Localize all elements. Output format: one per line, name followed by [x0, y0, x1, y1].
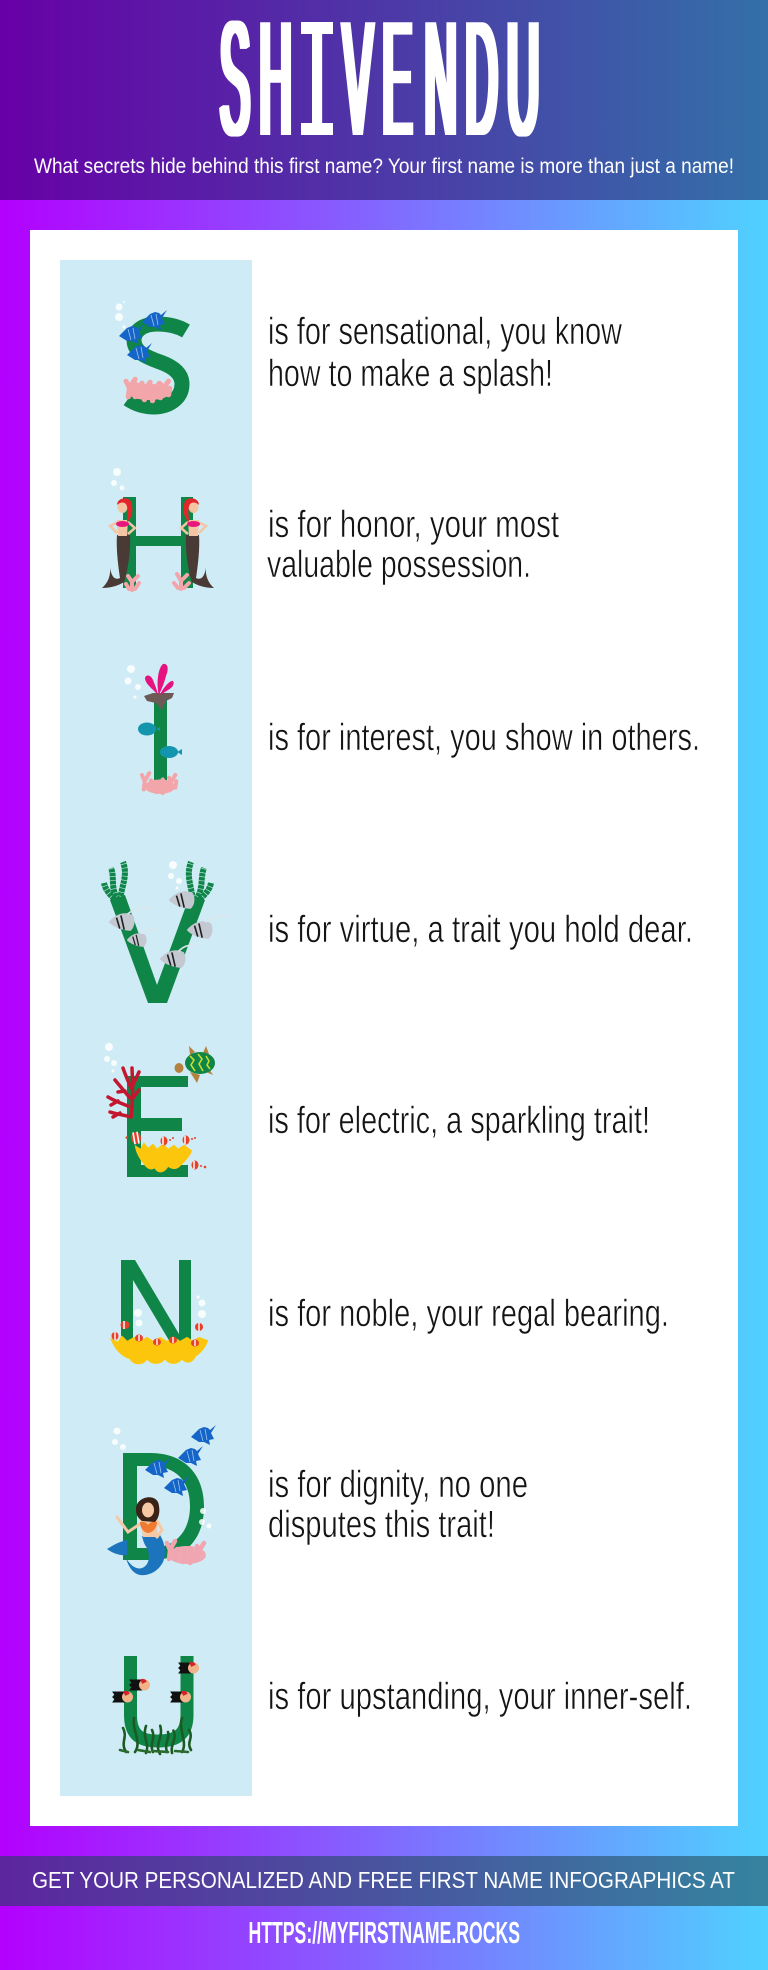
- angel fish 1: [109, 908, 151, 931]
- letter D illustration: [107, 1425, 216, 1575]
- is for E text: is for electric, a sparkling trait!: [268, 1100, 650, 1142]
- torso: [140, 1519, 158, 1537]
- clownfish 7: [195, 1323, 203, 1331]
- letter S shape: [128, 324, 186, 407]
- bubbles: [111, 468, 124, 490]
- red hair: [117, 498, 132, 522]
- blue fish: [145, 1425, 216, 1496]
- black and red fish: [112, 1662, 199, 1702]
- fish 3: [127, 343, 152, 363]
- fish 2: [142, 310, 167, 330]
- letter H shape: [123, 497, 193, 588]
- left mermaid: [102, 498, 135, 588]
- bubbles: [168, 861, 182, 890]
- letter I stem: [154, 700, 167, 784]
- S line 2: how to make a splash!: [268, 353, 553, 395]
- brown rock top: [144, 693, 174, 710]
- bubbles: [124, 665, 141, 698]
- clownfish 3: [182, 1136, 196, 1144]
- mermaid: [107, 1497, 165, 1575]
- header band: [0, 0, 768, 200]
- fish 3: [178, 1662, 199, 1674]
- clownfish group: [112, 1321, 203, 1346]
- letter S illustration: [115, 301, 186, 407]
- torso: [117, 520, 128, 536]
- bra: [187, 521, 200, 527]
- yellow coral: [136, 1144, 191, 1171]
- clownfish 2: [160, 1136, 174, 1146]
- clownfish 3: [135, 1334, 143, 1342]
- shell zigzag: [190, 1054, 210, 1071]
- fish 4: [164, 1476, 189, 1496]
- letter H illustration: [102, 468, 214, 590]
- bra: [116, 521, 129, 527]
- fish 1: [119, 324, 144, 344]
- arms: [117, 1517, 162, 1537]
- fish 4: [170, 1691, 191, 1702]
- bubbles: [104, 1043, 117, 1072]
- is for D text: [268, 1464, 528, 1546]
- letter E illustration: [104, 1043, 215, 1177]
- letter E shape: [127, 1076, 188, 1177]
- bubbles: [112, 1428, 212, 1528]
- tail fluke: [107, 1540, 127, 1555]
- D line 1: is for dignity, no one: [268, 1464, 528, 1506]
- D line 2: disputes this trait!: [268, 1504, 495, 1546]
- bubbles: [134, 1296, 206, 1326]
- footer url: HTTPS://MYFIRSTNAME.ROCKS: [248, 1916, 520, 1950]
- turtle: [174, 1046, 215, 1083]
- clownfish 1: [120, 1321, 130, 1329]
- teal fish: [138, 722, 182, 758]
- H line 1: is for honor, your most: [268, 504, 559, 546]
- face: [188, 501, 198, 513]
- arms: [110, 522, 135, 534]
- seaweed: [120, 1718, 191, 1754]
- right mermaid: [181, 498, 214, 588]
- corals: [126, 574, 189, 590]
- coral: [126, 379, 171, 401]
- shell: [185, 1052, 215, 1074]
- letter I illustration: [124, 664, 182, 794]
- tail: [102, 535, 130, 588]
- hair: [136, 1497, 159, 1522]
- flippers and head: [174, 1046, 213, 1083]
- H line 2: valuable possession.: [267, 544, 531, 586]
- torso: [188, 520, 199, 536]
- angel fish 2: [127, 930, 159, 947]
- orange top: [140, 1522, 157, 1533]
- fish 1: [191, 1425, 216, 1445]
- footer band: [0, 1856, 768, 1906]
- fish 2: [129, 1679, 150, 1690]
- seaweed fronds: [104, 862, 211, 902]
- letter D shape: [123, 1453, 204, 1560]
- red hair: [184, 498, 199, 522]
- letter N shape: [121, 1260, 191, 1342]
- is for S text: [268, 311, 622, 395]
- angel fish: [109, 891, 229, 968]
- pink fountain: [145, 664, 174, 695]
- yellow coral: [112, 1337, 207, 1363]
- is for H text: [267, 504, 559, 586]
- angel fish 3: [169, 891, 194, 909]
- fish 3: [145, 1458, 170, 1478]
- letter V illustration: [104, 861, 229, 1003]
- clownfish 6: [191, 1340, 199, 1346]
- clownfish 1: [125, 1131, 142, 1146]
- bubbles: [115, 301, 126, 328]
- letter U shape: [130, 1656, 187, 1741]
- face: [118, 501, 128, 513]
- light blue letter column: [60, 260, 252, 1796]
- letter N illustration: [112, 1260, 207, 1363]
- fish 2: [178, 1446, 203, 1466]
- blue fish: [119, 310, 167, 363]
- clownfish 2: [112, 1332, 118, 1340]
- face: [142, 1502, 154, 1518]
- clownfish 4: [192, 1160, 206, 1170]
- angel fish 5: [160, 945, 195, 968]
- clownfish 5: [169, 1336, 177, 1344]
- letter U illustration: [112, 1656, 199, 1754]
- fish 1: [112, 1691, 133, 1702]
- arms: [181, 522, 206, 534]
- coral: [142, 773, 176, 794]
- angel fish 4: [187, 916, 229, 939]
- letter V shape: [110, 895, 205, 1003]
- tail: [186, 535, 214, 588]
- white content panel: [30, 230, 738, 1826]
- coral: [167, 1541, 206, 1564]
- S line 1: is for sensational, you know: [268, 311, 622, 353]
- red coral: [108, 1068, 139, 1117]
- clownfish: [125, 1131, 206, 1170]
- clownfish 4: [153, 1338, 161, 1346]
- blue tail: [126, 1535, 165, 1575]
